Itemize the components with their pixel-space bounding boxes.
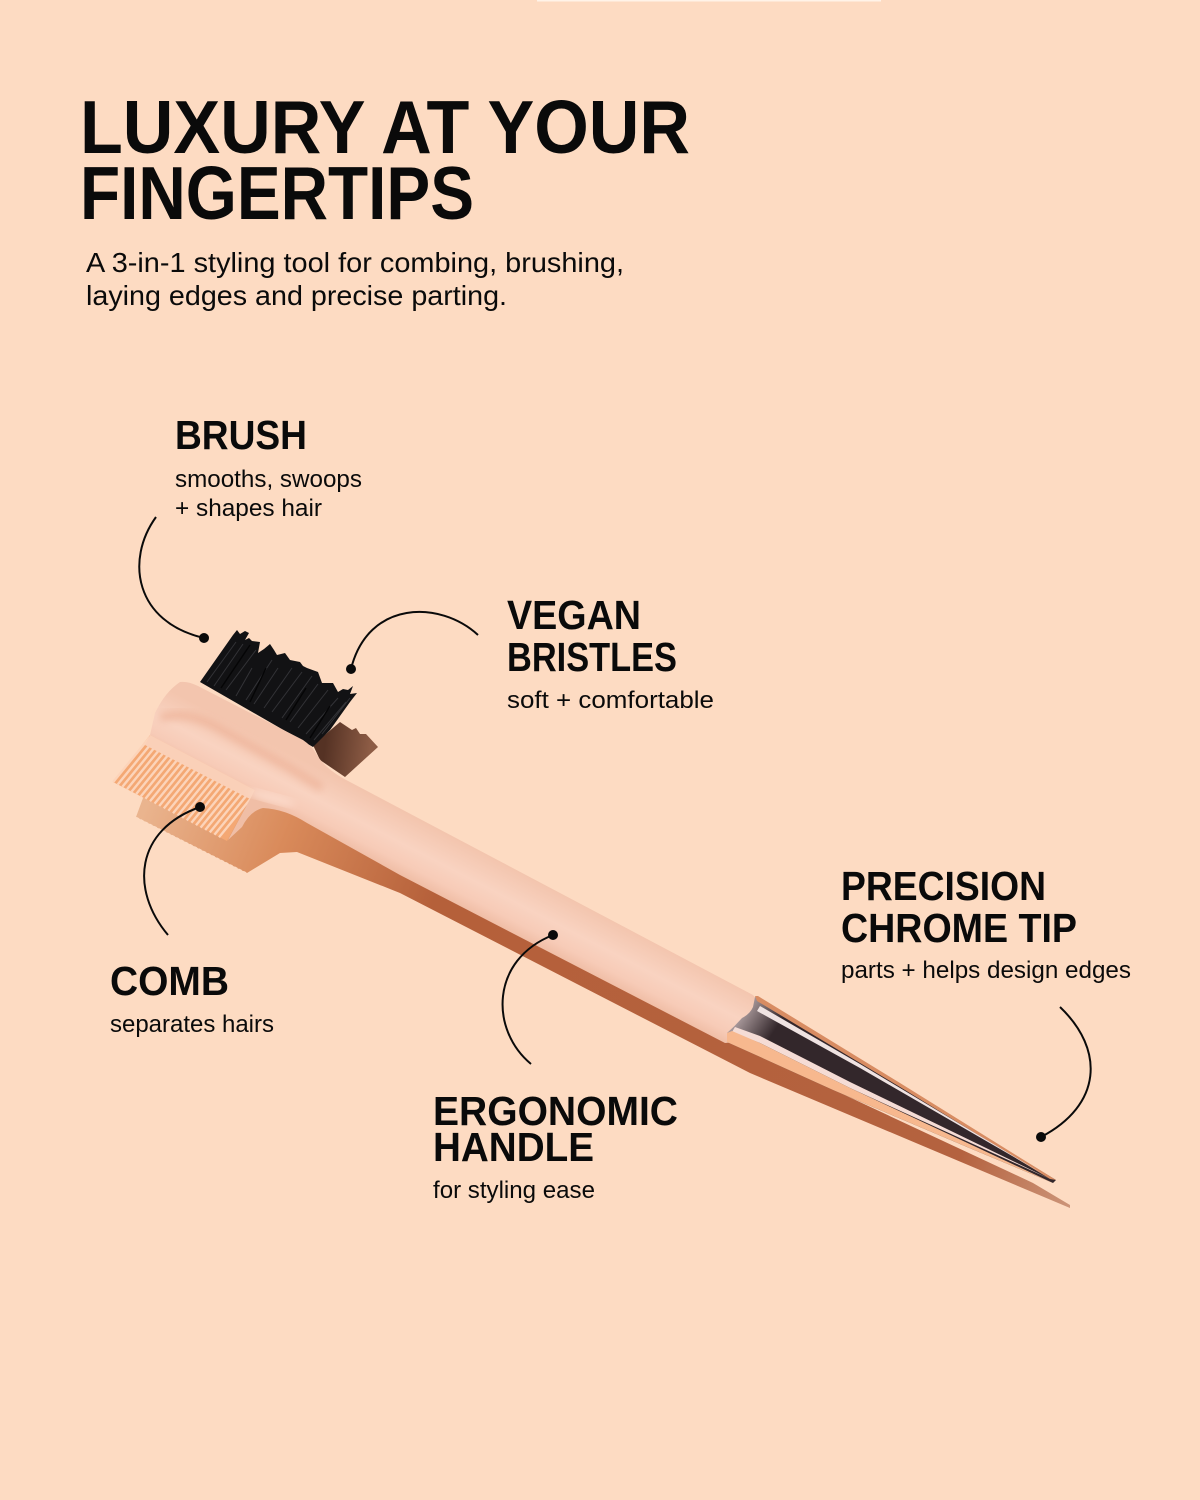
- subtitle: laying edges and precise parting.: [86, 280, 507, 311]
- callout: vegan bristles: [346, 592, 714, 714]
- label: ergonomic handle: ERGONOMIC: [433, 1088, 678, 1134]
- connector: vegan bristles: [346, 612, 478, 674]
- label: comb: COMB: [110, 958, 229, 1004]
- label: vegan bristles: VEGAN: [507, 592, 641, 638]
- chrome tip: [727, 996, 1056, 1183]
- label: ergonomic handle: HANDLE: [433, 1124, 594, 1170]
- label: precision chrome tip: [841, 863, 1131, 984]
- neck highlight: [248, 787, 296, 809]
- connector: comb: [144, 802, 205, 935]
- label: ergonomic handle: [433, 1088, 678, 1204]
- callout: brush: [139, 412, 362, 643]
- title: [80, 85, 690, 235]
- connector: brush: [139, 517, 209, 643]
- handle and head: [150, 682, 760, 1043]
- label: comb: [110, 958, 274, 1038]
- cast shadow: [136, 722, 1070, 1208]
- callout: precision chrome tip: [841, 863, 1131, 1142]
- subtitle: [86, 247, 624, 311]
- subtitle: A 3-in-1 styling tool for combing, brushing,: [86, 247, 624, 278]
- label: precision chrome tip: PRECISION: [841, 863, 1046, 909]
- connector: ergonomic handle: [503, 930, 558, 1064]
- title: LUXURY AT YOUR: [80, 85, 690, 169]
- label: precision chrome tip: CHROME TIP: [841, 905, 1077, 951]
- bristles: [200, 630, 357, 747]
- callout: comb: [110, 802, 274, 1038]
- label: vegan bristles: soft + comfortable: [507, 687, 714, 714]
- label: brush: + shapes hair: [175, 495, 322, 522]
- label: brush: smooths, swoops: [175, 466, 362, 493]
- label: ergonomic handle: for styling ease: [433, 1177, 595, 1204]
- connector: precision chrome tip: [1036, 1007, 1091, 1142]
- label: comb: separates hairs: [110, 1011, 274, 1038]
- label: vegan bristles: [507, 592, 714, 714]
- label: brush: [175, 412, 362, 522]
- head crease: [160, 715, 322, 788]
- comb: [113, 735, 256, 841]
- callout: ergonomic handle: [433, 930, 678, 1204]
- product: styling tool: [113, 630, 1070, 1208]
- top edge strip: [537, 0, 881, 2]
- label: brush: BRUSH: [175, 412, 307, 458]
- title: FINGERTIPS: [80, 151, 474, 235]
- label: vegan bristles: BRISTLES: [507, 634, 677, 680]
- label: precision chrome tip: parts + helps design edges: [841, 957, 1131, 984]
